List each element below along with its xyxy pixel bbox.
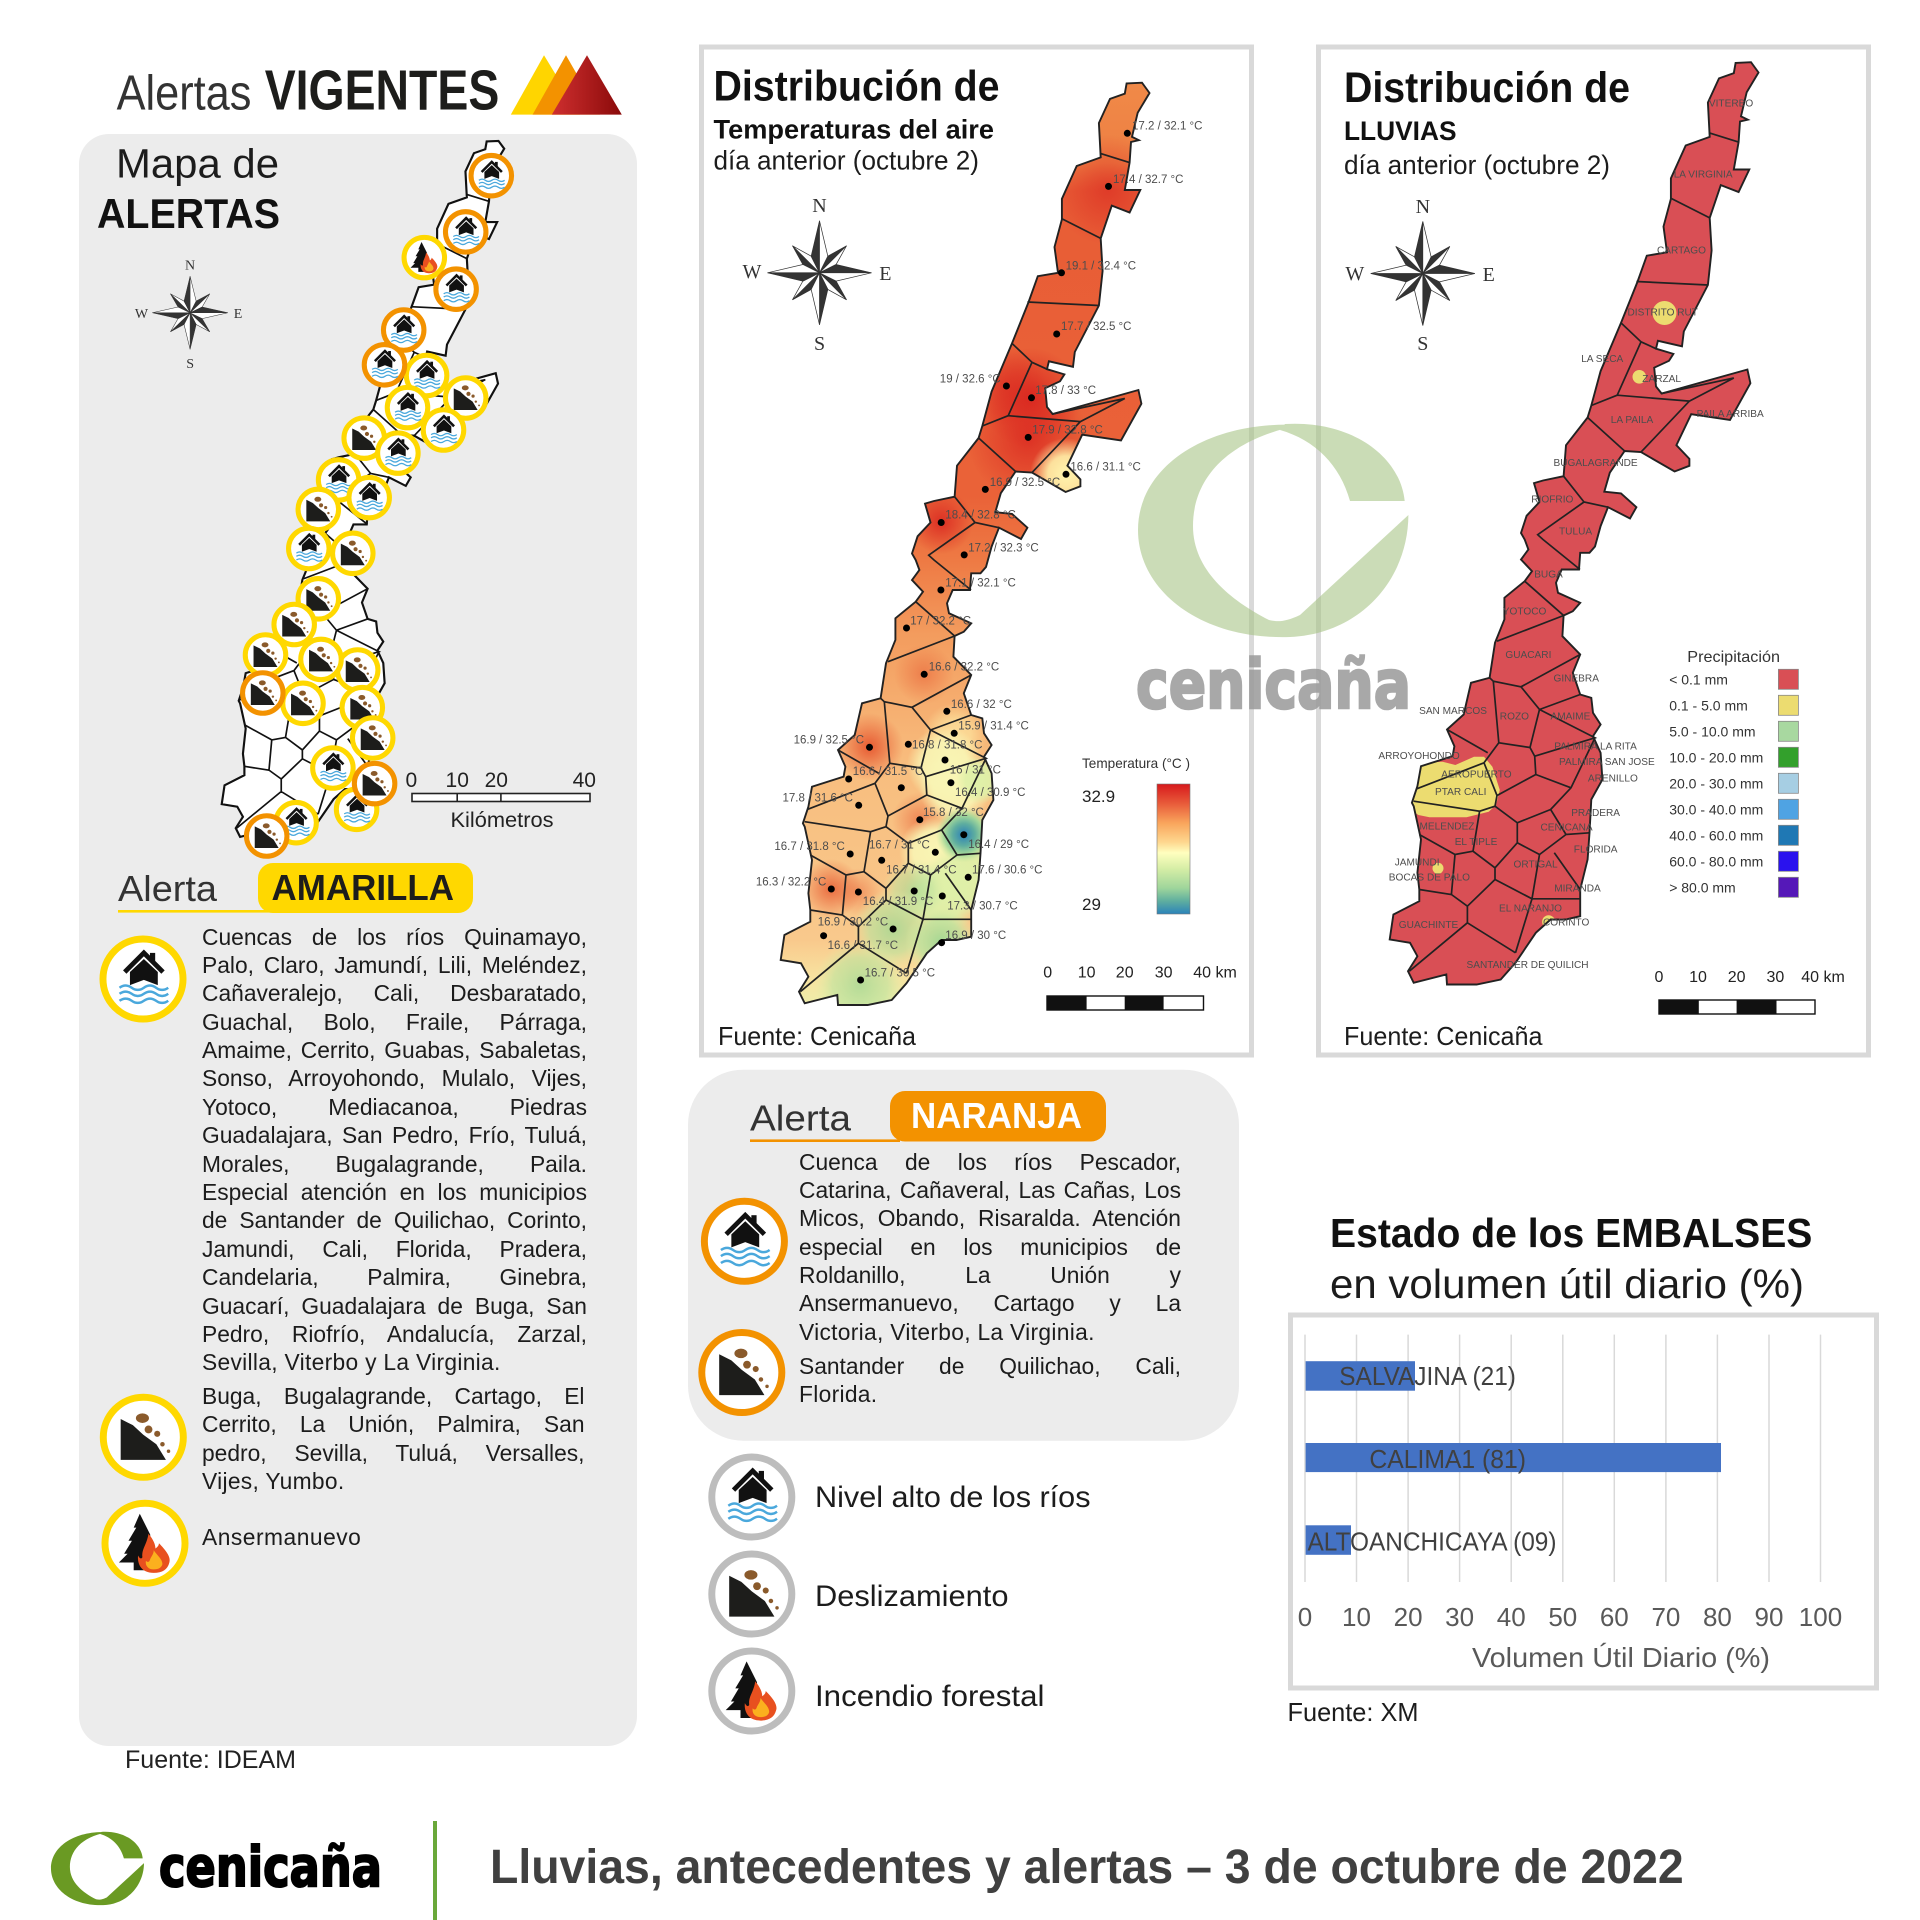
map labels: station temperatures: 16.8 / 31.8 °C [912, 739, 982, 751]
source: Cenicaña, temperature: Fuente: Cenicaña [718, 1021, 917, 1051]
title: Alertas Vigentes [117, 58, 499, 122]
heading: Mapa de Alertas: ALERTAS [97, 190, 280, 237]
icon: forest fire, grey [712, 1651, 792, 1731]
heading: Alerta Naranja [750, 1091, 1106, 1142]
title: Alertas Vigentes: VIGENTES [265, 58, 499, 122]
heading: temperature title: día anterior (octubre 2) [714, 146, 979, 176]
title: Alertas Vigentes: Alertas [117, 66, 251, 120]
scale bar: rainfall: 30 [1767, 969, 1784, 986]
map labels: station temperatures: 16.4 / 29 °C [968, 839, 1029, 851]
chart: reservoir useful volume bars: 30 [1445, 1602, 1474, 1632]
legend: temperature colour bar: Temperatura (°C ) [1082, 755, 1190, 771]
icon: river level, orange [704, 1201, 784, 1281]
heading: temperature title: Temperaturas del aire [714, 114, 994, 144]
map labels: rainfall stations: PALMIRA LA RITA [1554, 742, 1637, 753]
map labels: station temperatures: 16.7 / 31.4 °C [886, 864, 957, 876]
chart: reservoir useful volume bars: 0 [1298, 1602, 1312, 1632]
map labels: station temperatures: 16.6 / 32.2 °C [929, 662, 999, 674]
text block: Naranja river basins: Micos, Obando, Risaralda. Atención [799, 1205, 1181, 1231]
map labels: rainfall stations: BUGA [1534, 569, 1563, 580]
chart: reservoir useful volume bars: CALIMA1 (81) [1369, 1444, 1526, 1474]
scale bar: rainfall: 40 km [1801, 969, 1845, 986]
map labels: station temperatures: 17.4 / 32.7 °C [1113, 174, 1183, 186]
text block: Naranja river basins: Cuenca de los ríos Pescador, [799, 1148, 1181, 1174]
map labels: rainfall stations: PALMIRA SAN JOSE [1559, 757, 1655, 768]
icon: compass rose, temperature: E [879, 263, 892, 285]
map labels: rainfall stations: ARROYOHONDO [1378, 751, 1460, 762]
map labels: rainfall stations: ROZO [1500, 712, 1529, 723]
text block: Amarilla river basins: Sevilla, Viterbo y La Virginia. [202, 1349, 501, 1375]
map labels: rainfall stations: JAMUNDI [1395, 858, 1440, 869]
map labels: station temperatures: 17.2 / 32.3 °C [968, 542, 1039, 554]
map labels: rainfall stations: BOCAS DE PALO [1389, 873, 1470, 884]
map: temperature heat surface [781, 83, 1163, 1031]
scale bar: temperature: 40 km [1193, 964, 1237, 982]
heading: Alerta Amarilla: AMARILLA [272, 867, 454, 908]
map labels: rainfall stations: ZARZAL [1642, 374, 1681, 385]
text block: Amarilla river basins: Candelaria, Palmira, Ginebra, [202, 1264, 587, 1290]
footer divider [433, 1821, 437, 1920]
map labels: station temperatures: 17.6 / 30.6 °C [972, 864, 1042, 876]
heading: rainfall title: día anterior (octubre 2) [1344, 150, 1610, 180]
text block: Naranja river basins: especial en los municipios de [799, 1234, 1181, 1260]
map labels: rainfall stations: AMAIME [1550, 711, 1591, 722]
scale bar: temperature: 10 [1078, 964, 1096, 982]
icon: compass rose, temperature: S [814, 333, 825, 355]
icon: river level, grey [712, 1457, 792, 1537]
map labels: rainfall stations: MIRANDA [1554, 883, 1601, 894]
map labels: rainfall stations: LA PAILA [1611, 415, 1654, 426]
text block: Amarilla river basins: Especial atención en los municipios [202, 1179, 587, 1205]
source: IDEAM: Fuente: IDEAM [125, 1746, 296, 1774]
legend: temperature colour bar: 29 [1082, 895, 1101, 914]
icon: compass rose, rainfall: N [1416, 196, 1430, 218]
chart: reservoir useful volume bars: Volumen Útil Diario (%) [1472, 1642, 1770, 1673]
text block: Naranja river basins: Roldanillo, La Unión y [799, 1262, 1181, 1288]
text block: Naranja river basins: Ansermanuevo, Cartago y La [799, 1290, 1181, 1316]
scale bar: temperature [1043, 964, 1237, 1010]
watermark: Cenicaña logo: cenicaña [1136, 646, 1411, 725]
map labels: rainfall stations: CORINTO [1543, 917, 1590, 928]
scale bar: alert map [405, 769, 596, 832]
heading: reservoir status: en volumen útil diario (%) [1330, 1261, 1804, 1307]
map labels: station temperatures: 19 / 32.6 °C [940, 374, 1001, 386]
map labels: station temperatures: 15.9 / 31.4 °C [958, 721, 1029, 733]
chart: reservoir useful volume bars: 50 [1548, 1602, 1577, 1632]
legend: precipitation: > 80.0 mm [1669, 879, 1736, 895]
heading: Mapa de Alertas: Mapa de [116, 140, 279, 186]
icon: compass rose, rainfall: E [1483, 264, 1495, 286]
map labels: rainfall stations: TULUA [1559, 526, 1592, 537]
chart: reservoir useful volume bars [1290, 1315, 1876, 1688]
scale bar: alert map: 40 [573, 769, 596, 792]
map labels: station temperatures: 17 / 32.2 °C [910, 616, 971, 628]
text block: Naranja river basins: Catarina, Cañaveral, Las Cañas, Los [799, 1177, 1181, 1203]
label: river level: Nivel alto de los ríos [815, 1481, 1090, 1514]
legend: precipitation: 0.1 - 5.0 mm [1669, 697, 1748, 713]
text block: Amarilla river basins: Guachal, Bolo, Fraile, Párraga, [202, 1009, 587, 1035]
map labels: rainfall stations: EL TIPLE [1455, 837, 1498, 848]
map labels: station temperatures: 16.6 / 31.5 °C [853, 766, 923, 778]
panel: Alerta Naranja [688, 1070, 1239, 1441]
heading: rainfall title: Distribución de [1344, 64, 1630, 112]
legend: temperature colour bar: 32.9 [1082, 787, 1115, 806]
scale bar: alert map: 20 [485, 769, 508, 792]
chart: reservoir useful volume bars: 90 [1755, 1602, 1783, 1632]
text block: Naranja landslide municipalities: Florida. [799, 1381, 877, 1407]
icon: landslide, yellow [103, 1397, 183, 1477]
heading: temperature title: Distribución de [714, 63, 1000, 111]
map labels: rainfall stations [1378, 98, 1764, 971]
map labels: rainfall stations: EL NARANJO [1499, 903, 1562, 914]
map labels: station temperatures: 18.4 / 32.8 °C [945, 510, 1016, 522]
legend: precipitation: 30.0 - 40.0 mm [1669, 801, 1763, 817]
heading: rainfall title: LLUVIAS [1344, 116, 1456, 146]
chart: reservoir useful volume bars: 20 [1394, 1602, 1423, 1632]
text block: Amarilla river basins: Guadalajara, San Pedro, Frío, Tuluá, [202, 1122, 587, 1148]
map labels: station temperatures: 19.1 / 32.4 °C [1066, 261, 1136, 273]
icon: compass rose, alert map: E [234, 307, 242, 322]
text block: Amarilla river basins: Cuencas de los ríos Quinamayo, [202, 924, 587, 950]
map labels: station temperatures: 17.1 / 32.1 °C [945, 577, 1016, 589]
legend: precipitation [1669, 649, 1798, 897]
icon: compass rose, rainfall: S [1417, 333, 1428, 355]
chart: reservoir useful volume bars: 100 [1799, 1602, 1842, 1632]
watermark: Cenicaña logo [1136, 424, 1411, 725]
scale bar: alert map: 10 [446, 769, 469, 792]
label: landslide: Deslizamiento [815, 1580, 1008, 1613]
text block: Amarilla landslide municipalities: Cerrito, La Unión, Palmira, San [202, 1411, 584, 1437]
map labels: rainfall stations: GUACARI [1505, 650, 1551, 661]
scale bar: rainfall [1655, 969, 1845, 1014]
map labels: rainfall stations: DISTRITO RUT [1628, 307, 1698, 318]
icon: compass rose, alert map: W [135, 307, 149, 322]
scale bar: temperature: 0 [1043, 964, 1052, 982]
map labels: rainfall stations: RIOFRIO [1531, 494, 1574, 505]
map labels: station temperatures: 16.9 / 30 °C [945, 930, 1006, 942]
text block: Amarilla forest fire municipality: Ansermanuevo [202, 1524, 361, 1550]
text block: Naranja river basins [799, 1148, 1182, 1345]
chart: reservoir useful volume bars: 60 [1600, 1602, 1629, 1632]
chart: reservoir useful volume bars: 80 [1703, 1602, 1732, 1632]
map labels: station temperatures: 16.4 / 31.9 °C [863, 896, 933, 908]
scale bar: temperature: 20 [1116, 964, 1134, 982]
scale bar: rainfall: 0 [1655, 969, 1664, 986]
legend: precipitation: 60.0 - 80.0 mm [1669, 853, 1763, 869]
map labels: rainfall stations: GINEBRA [1554, 673, 1599, 684]
text block: Amarilla river basins: Palo, Claro, Jamundí, Lili, Meléndez, [202, 952, 587, 978]
scale bar: temperature: 30 [1155, 964, 1173, 982]
map labels: station temperatures: 16.9 / 30.2 °C [818, 916, 888, 928]
text block: Amarilla landslide municipalities: pedro, Sevilla, Tuluá, Versalles, [202, 1440, 584, 1466]
map labels: rainfall stations: PTAR CALI [1435, 787, 1486, 798]
icon: compass rose, temperature: N [812, 195, 827, 217]
icon: river level, yellow [103, 939, 183, 1019]
scale bar: rainfall: 10 [1689, 969, 1707, 986]
text block: Naranja landslide municipalities [799, 1353, 1181, 1407]
text block: Amarilla landslide municipalities [202, 1383, 584, 1494]
map labels: station temperatures: 16.7 / 31 °C [869, 839, 930, 851]
icon: landslide, orange [702, 1332, 782, 1413]
map labels: station temperatures: 16.3 / 32.2 °C [756, 876, 826, 888]
text block: Naranja river basins: Victoria, Viterbo, La Virginia. [799, 1319, 1095, 1345]
text block: Amarilla landslide municipalities: Vijes, Yumbo. [202, 1468, 344, 1494]
text block: Amarilla river basins: Guacarí, Guadalajara de Buga, San [202, 1293, 587, 1319]
legend: hazard types [712, 1457, 1090, 1731]
map labels: station temperatures: 16.6 / 31.7 °C [828, 940, 898, 952]
map labels: rainfall stations: PRADERA [1571, 808, 1620, 819]
map labels: station temperatures: 16.6 / 31.1 °C [1070, 462, 1141, 474]
source: Cenicaña, rainfall: Fuente: Cenicaña [1344, 1021, 1543, 1051]
chart: reservoir useful volume bars: ALTOANCHICAYA (09) [1308, 1527, 1556, 1557]
map labels: station temperatures: 16.7 / 30.5 °C [865, 967, 935, 979]
heading: Alerta Naranja: Alerta [750, 1097, 852, 1138]
source: XM: Fuente: XM [1288, 1697, 1418, 1727]
text block: Amarilla landslide municipalities: Buga, Bugalagrande, Cartago, El [202, 1383, 584, 1409]
legend: precipitation: 40.0 - 60.0 mm [1669, 827, 1763, 843]
map labels: rainfall stations: SAN MARCOS [1419, 706, 1487, 717]
map labels: station temperatures: 17.8 / 31.6 °C [782, 792, 853, 804]
text block: Amarilla river basins: Jamundi, Cali, Florida, Pradera, [202, 1236, 587, 1262]
text block: Naranja landslide municipalities: Santander de Quilichao, Cali, [799, 1353, 1181, 1379]
map labels: station temperatures: 17.9 / 32.8 °C [1032, 424, 1103, 436]
map labels: station temperatures: 16.9 / 32.5 °C [990, 477, 1060, 489]
scale bar: alert map: 0 [405, 769, 417, 792]
icon: compass rose, temperature: W [743, 261, 762, 283]
icon: forest fire, yellow [105, 1503, 185, 1583]
chart: reservoir useful volume bars: SALVAJINA (21) [1339, 1361, 1516, 1391]
icon: mountains [511, 55, 622, 115]
icon: compass rose, alert map [135, 258, 242, 372]
heading: reservoir status: Estado de los EMBALSES [1330, 1210, 1812, 1256]
heading: Alerta Naranja: NARANJA [911, 1095, 1082, 1136]
map labels: station temperatures: 17.2 / 32.1 °C [1132, 121, 1202, 133]
footer title: Lluvias, antecedentes y alertas – 3 de octubre de 2022 [490, 1841, 1684, 1894]
text block: Amarilla river basins: Pedro, Riofrío, Andalucía, Zarzal, [202, 1321, 587, 1347]
map labels: rainfall stations: YOTOCO [1503, 607, 1547, 618]
map icons: alert markers [243, 155, 512, 856]
map labels: station temperatures: 16.4 / 30.9 °C [955, 787, 1025, 799]
map labels: rainfall stations: FLORIDA [1574, 845, 1618, 856]
map labels: rainfall stations: CENICANA [1540, 823, 1593, 834]
map labels: rainfall stations: GUACHINTE [1399, 920, 1459, 931]
map labels: rainfall stations: ORTIGAL [1514, 859, 1558, 870]
legend: temperature colour bar [1082, 755, 1190, 914]
map labels: station temperatures: 16.6 / 32 °C [951, 699, 1012, 711]
map: rainfall surface [1390, 62, 1758, 984]
legend: precipitation: 5.0 - 10.0 mm [1669, 723, 1756, 739]
map labels: station temperatures: 17.3 / 30.7 °C [947, 900, 1018, 912]
map labels: rainfall stations: VITERBO [1709, 98, 1753, 109]
scale bar: rainfall: 20 [1728, 969, 1746, 986]
text block: Amarilla river basins: de Santander de Quilichao, Corinto, [202, 1207, 587, 1233]
icon: compass rose, rainfall: W [1345, 263, 1364, 285]
text block: Amarilla river basins: Morales, Bugalagrande, Paila. [202, 1151, 587, 1177]
map labels: station temperatures: 17.8 / 33 °C [1035, 385, 1096, 397]
panel: alert map background [79, 134, 637, 1746]
heading: Mapa de Alertas [97, 140, 280, 237]
text block: Amarilla river basins: Sonso, Arroyohondo, Mulalo, Vijes, [202, 1065, 587, 1091]
chart: reservoir useful volume bars: 40 [1497, 1602, 1526, 1632]
map labels: rainfall stations: PAILA ARRIBA [1697, 409, 1764, 420]
heading: reservoir status [1330, 1210, 1812, 1307]
map labels: station temperatures: 17.7 / 32.5 °C [1061, 321, 1131, 333]
legend: precipitation: 10.0 - 20.0 mm [1669, 749, 1763, 765]
scale bar: alert map: Kilómetros [450, 809, 554, 832]
text block: Amarilla river basins [202, 924, 587, 1375]
map labels: station temperatures: 16.7 / 31.8 °C [774, 841, 845, 853]
map labels: station temperatures: 15.8 / 32 °C [923, 807, 984, 819]
map points: stations [820, 130, 1131, 984]
legend: precipitation: < 0.1 mm [1669, 671, 1728, 687]
map labels: rainfall stations: LA VIRGINIA [1674, 170, 1733, 181]
chart: reservoir useful volume bars: 10 [1342, 1602, 1371, 1632]
footer logo: Cenicaña [51, 1832, 382, 1905]
heading: Alerta Amarilla: Alerta [118, 868, 218, 909]
panel: rainfall map [1318, 47, 1868, 1055]
map labels: rainfall stations: MELENDEZ [1420, 822, 1474, 833]
chart: reservoir useful volume bars: 70 [1651, 1602, 1680, 1632]
footer logo: Cenicaña: cenicaña [159, 1835, 382, 1899]
heading: rainfall title [1344, 64, 1630, 180]
map labels: rainfall stations: BUGALAGRANDE [1554, 458, 1638, 469]
label: forest fire: Incendio forestal [815, 1680, 1044, 1713]
text block: Amarilla river basins: Yotoco, Mediacanoa, Piedras [202, 1094, 587, 1120]
map labels: rainfall stations: CARTAGO [1657, 246, 1706, 257]
icon: compass rose, temperature [743, 195, 892, 355]
heading: Alerta Amarilla [118, 863, 473, 913]
map labels: rainfall stations: LA SECA [1581, 354, 1624, 365]
heading: temperature title [714, 63, 1000, 176]
text block: Amarilla river basins: Cañaveralejo, Cali, Desbaratado, [202, 980, 587, 1006]
map labels: station temperatures: 16 / 31 °C [950, 764, 1001, 776]
map labels: rainfall stations: SANTANDER DE QUILICH [1466, 960, 1589, 971]
icon: compass rose, rainfall [1345, 196, 1495, 355]
map labels: station temperatures [756, 121, 1202, 979]
map: alert municipalities [222, 141, 504, 838]
legend: precipitation: Precipitación [1687, 649, 1780, 666]
icon: landslide, grey [712, 1554, 792, 1634]
text block: Amarilla river basins: Amaime, Cerrito, Guabas, Sabaletas, [202, 1037, 587, 1063]
map labels: station temperatures: 16.9 / 32.5 °C [794, 734, 864, 746]
map labels: rainfall stations: AEROPUERTO [1441, 769, 1512, 780]
panel: temperature map [702, 47, 1252, 1055]
legend: precipitation: 20.0 - 30.0 mm [1669, 775, 1763, 791]
icon: compass rose, alert map: S [186, 357, 194, 372]
map labels: rainfall stations: ARENILLO [1588, 774, 1638, 785]
icon: compass rose, alert map: N [185, 258, 195, 274]
